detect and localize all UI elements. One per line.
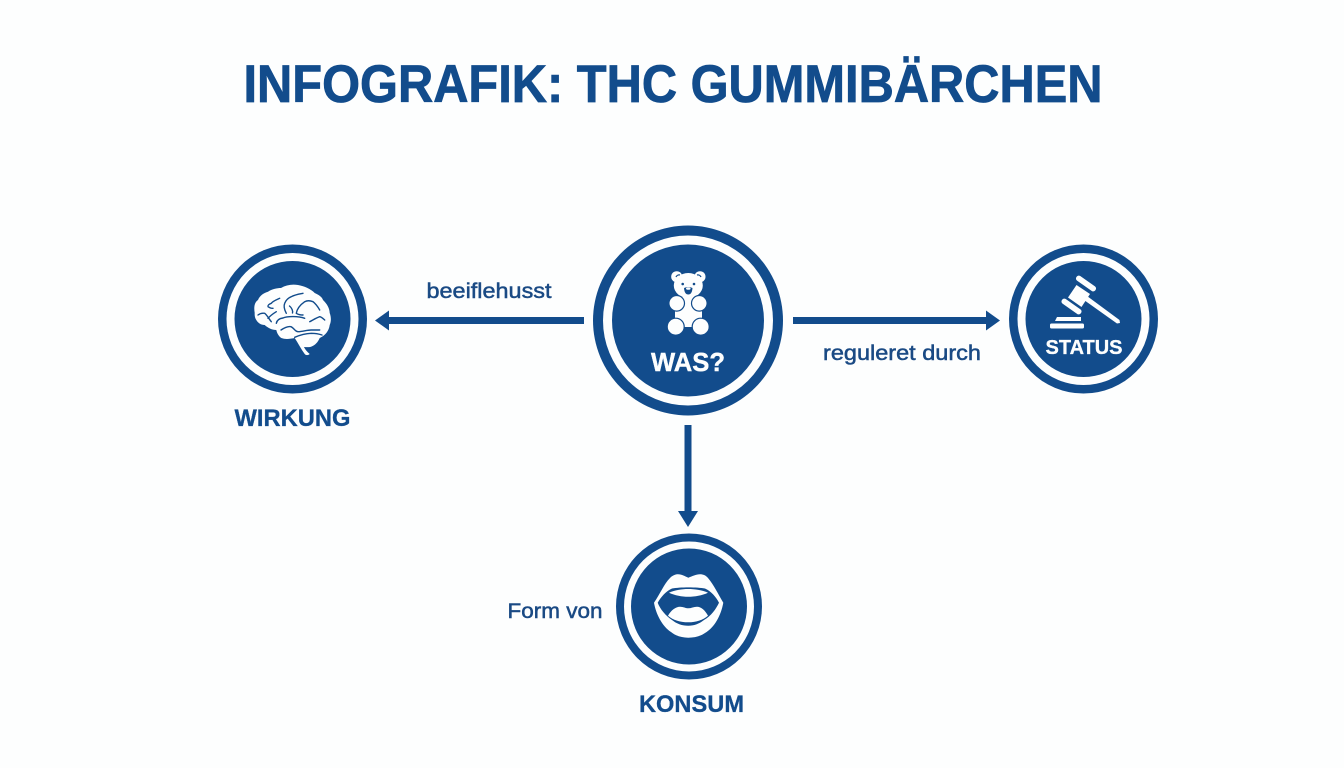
arrow: center to Status [793, 310, 1000, 330]
arrow: center to Konsum [678, 425, 698, 527]
node: Konsum [616, 534, 762, 680]
icon: brain [254, 285, 331, 355]
node: Status [1009, 244, 1158, 394]
node: center WAS? [593, 226, 783, 416]
node text: STATUS: STATUS [1046, 337, 1122, 359]
node label: WIRKUNG: WIRKUNG [234, 405, 350, 432]
arrow label: Form von: Form von [508, 599, 602, 623]
arrow label: beeinflusst: beeiflehusst [426, 279, 552, 303]
node label: KONSUM: KONSUM [639, 691, 744, 718]
icon: gavel [1050, 275, 1120, 328]
arrow label: reguliert durch: reguleret durch [823, 341, 981, 365]
arrow: center to Wirkung [375, 310, 584, 330]
node: Wirkung [218, 244, 367, 394]
icon: gummy bear [667, 271, 709, 335]
title: INFOGRAFIK: THC GUMMIBÄRCHEN [244, 55, 1102, 114]
node text: WAS?: WAS? [651, 347, 725, 377]
icon: mouth [654, 574, 723, 638]
